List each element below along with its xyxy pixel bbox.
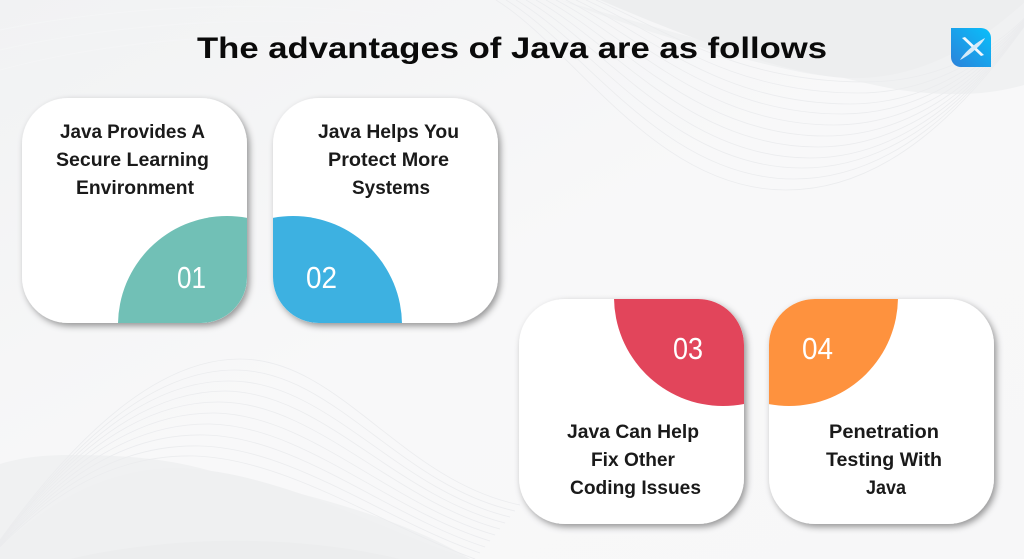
- quarter circle 03: [614, 299, 744, 406]
- text: card 02: [318, 121, 459, 199]
- text: card 04: Testing With: [826, 449, 942, 471]
- quarter circle 01: [118, 216, 247, 323]
- quarter circle 04: [769, 299, 898, 406]
- text: card 02: Java Helps You: [318, 121, 459, 143]
- icon: logo: [951, 28, 991, 67]
- text: card 03: Fix Other: [591, 449, 675, 471]
- panel: card 04: [767, 298, 1001, 532]
- quarter circle 02: [273, 216, 402, 323]
- text: card 03: Coding Issues: [570, 477, 701, 499]
- number 02: 02: [306, 260, 337, 295]
- title: The advantages of Java are as follows: [197, 32, 827, 65]
- text: card 01: Environment: [76, 177, 194, 199]
- text: card 01: [56, 121, 209, 199]
- text: card 04: Java: [866, 477, 906, 499]
- text: card 01: Java Provides A: [60, 121, 205, 143]
- number 04: 04: [802, 331, 833, 366]
- panel: card 02: [271, 96, 505, 330]
- panel: card 01: [20, 96, 254, 330]
- text: card 03: [567, 421, 701, 499]
- text: card 04: [826, 421, 942, 499]
- text: card 04: Penetration: [829, 421, 939, 443]
- text: card 02: Systems: [352, 177, 430, 199]
- panel: card 03: [517, 298, 751, 532]
- number 03: 03: [673, 331, 703, 366]
- number 01: 01: [177, 260, 206, 295]
- text: card 01: Secure Learning: [56, 149, 209, 171]
- text: card 03: Java Can Help: [567, 421, 699, 443]
- text: card 02: Protect More: [328, 149, 449, 171]
